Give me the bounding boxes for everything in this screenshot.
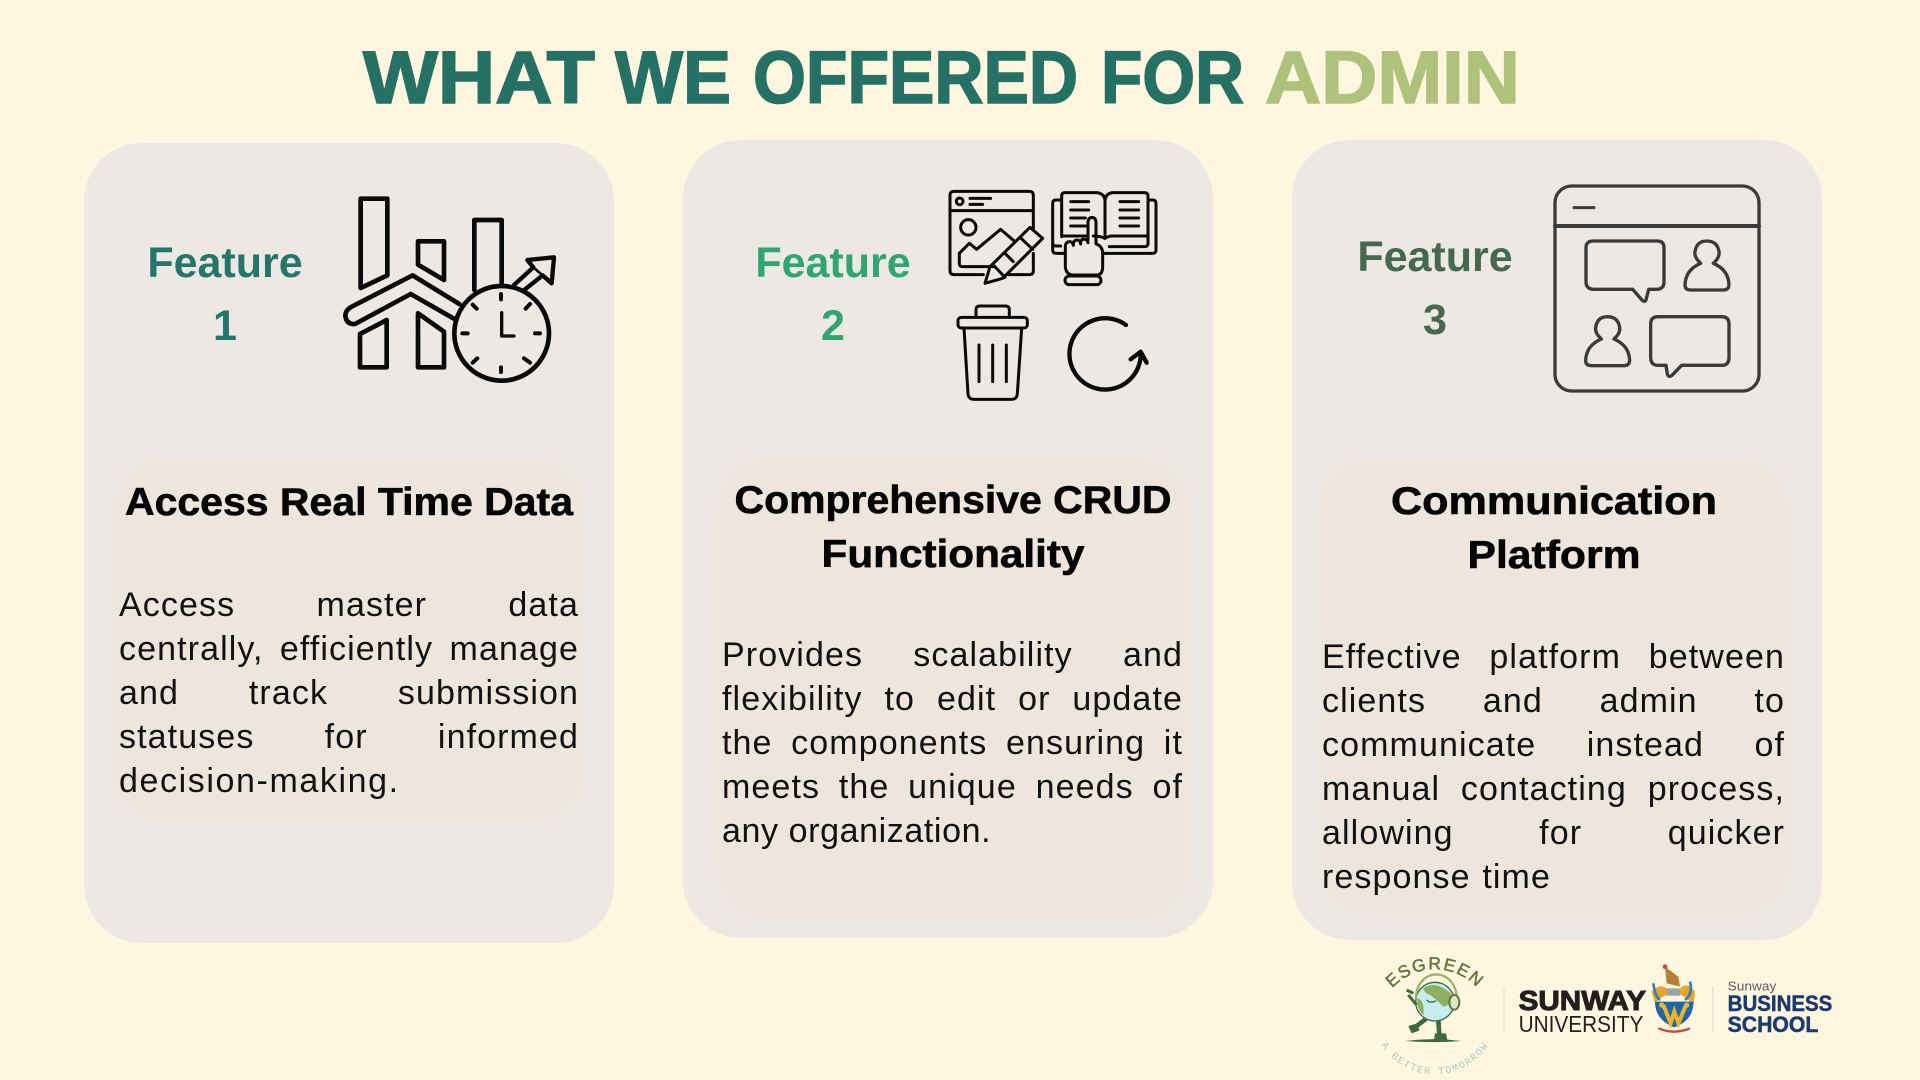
inner card — [1318, 460, 1790, 914]
logo: sunway university — [1519, 985, 1646, 1037]
divider — [1504, 987, 1713, 1033]
inner card — [113, 460, 584, 821]
body text: communicate instead of — [1322, 726, 1785, 764]
icon: bar chart with clock — [343, 196, 556, 383]
panel: feature 3 — [1292, 140, 1822, 940]
logo: sunway university: UNIVERSITY — [1519, 1011, 1644, 1037]
body text — [722, 636, 1183, 850]
title: WHAT — [363, 36, 595, 119]
heading: Functionality — [822, 533, 1085, 576]
heading — [734, 479, 1172, 576]
body text: Effective platform between — [1322, 638, 1785, 676]
heading: Platform — [1468, 534, 1640, 577]
heading: Communication — [1391, 480, 1717, 523]
icon: refresh arrow — [1069, 318, 1147, 390]
panel: feature 1 — [84, 143, 614, 943]
title: FOR — [1101, 36, 1244, 119]
body text: Access master data — [119, 586, 579, 624]
icon: book with pointing hand — [1053, 193, 1156, 285]
feature 2 label: Feature — [755, 239, 911, 287]
logo: esgreen mascot: ESGREEN — [1384, 957, 1484, 988]
logo: sunway business school — [1728, 980, 1832, 1037]
body text: manual contacting process, — [1322, 770, 1785, 808]
icon: trash bin — [958, 306, 1027, 399]
feature 3 label: Feature — [1357, 233, 1513, 281]
icon: image edit — [950, 191, 1043, 283]
icon: CRUD icons — [948, 190, 1158, 401]
logo: sunway university: SUNWAY — [1519, 985, 1646, 1016]
panel: feature 2 — [683, 140, 1213, 938]
body text: and track submission — [119, 674, 579, 712]
body text: flexibility to edit or update — [722, 680, 1183, 718]
feature 1 label: Feature — [147, 239, 303, 287]
body text: decision-making. — [119, 762, 400, 800]
feature 3 label — [1357, 233, 1513, 344]
title: OFFERED — [753, 36, 1078, 119]
body text: the components ensuring it — [722, 724, 1183, 762]
body text: any organization. — [722, 812, 991, 850]
icon: chat window — [1553, 184, 1761, 393]
heading: Access Real Time Data — [125, 481, 573, 524]
body text — [119, 586, 579, 800]
logo: esgreen mascot — [1381, 957, 1488, 1074]
body text — [1322, 638, 1785, 896]
inner card — [718, 458, 1189, 919]
logo: sunway business school: BUSINESS — [1728, 991, 1832, 1016]
body text: centrally, efficiently manage — [119, 630, 579, 668]
logo: esgreen mascot: A BETTER TOMORROW — [1381, 1042, 1488, 1074]
feature 2 label — [755, 239, 911, 350]
title: ADMIN — [1265, 36, 1520, 119]
body text: meets the unique needs of — [722, 768, 1183, 806]
body text: statuses for informed — [119, 718, 579, 756]
feature 2 label: 2 — [821, 302, 845, 350]
feature 1 label — [147, 239, 303, 350]
body text: Provides scalability and — [722, 636, 1183, 674]
logo: crest — [1652, 964, 1695, 1032]
logos — [1381, 957, 1832, 1074]
title: WE — [615, 36, 731, 119]
title — [362, 36, 1520, 119]
logo: sunway business school: SCHOOL — [1728, 1012, 1818, 1037]
feature 3 label: 3 — [1423, 296, 1447, 344]
body text: clients and admin to — [1322, 682, 1785, 720]
feature 1 label: 1 — [213, 302, 237, 350]
body text: allowing for quicker — [1322, 814, 1785, 852]
heading — [1391, 480, 1717, 577]
body text: response time — [1322, 858, 1551, 896]
logo: sunway business school: Sunway — [1728, 980, 1777, 994]
heading: Comprehensive CRUD — [734, 479, 1172, 522]
